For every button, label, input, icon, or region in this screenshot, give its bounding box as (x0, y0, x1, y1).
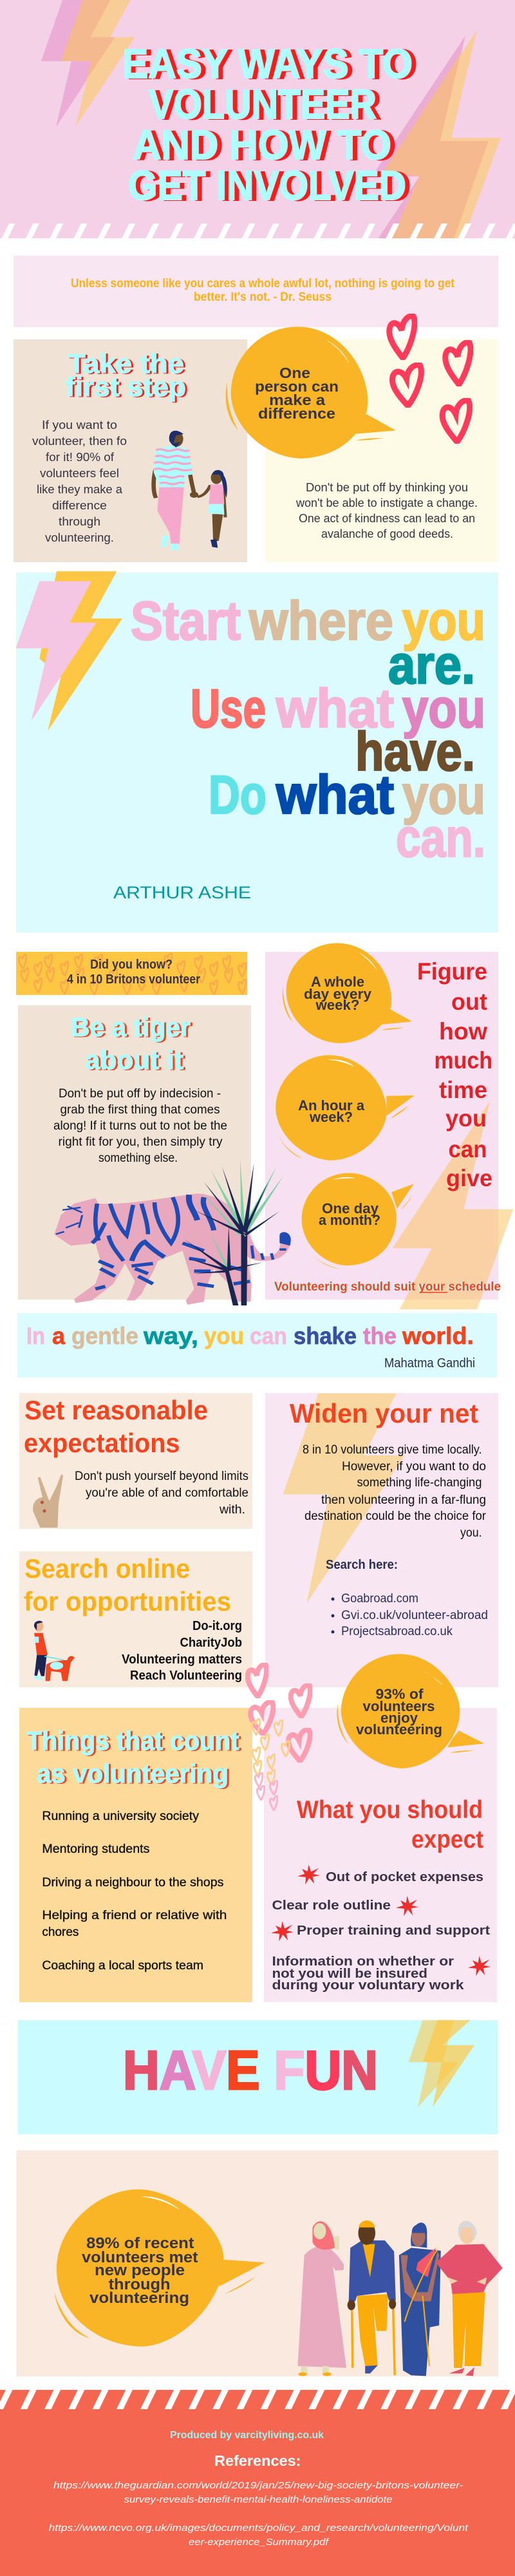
quote text: are. (388, 634, 475, 695)
heading: take the first step (66, 348, 188, 402)
quote text: what (276, 678, 394, 739)
speech bubble: One (279, 365, 310, 381)
speech bubble: whole day: day every (304, 986, 372, 1002)
text: search here (326, 1558, 488, 1638)
icon: person walking dog (34, 1621, 75, 1681)
list: Mentoring students (42, 1842, 149, 1856)
speech bubble: one day a month: One day (322, 1200, 379, 1217)
quote text: what (276, 764, 394, 825)
panel: figure out how much time (265, 943, 513, 1309)
title: VOLUNTEER (149, 81, 377, 128)
panel: Gandhi quote: a (52, 1323, 65, 1349)
panel: widen your net (265, 1393, 498, 1687)
panel: Gandhi quote: world. (402, 1323, 474, 1349)
illustration: tiger (54, 1193, 291, 1305)
panel: take the first step (14, 339, 247, 562)
heading: for opportunities (24, 1586, 231, 1616)
heading (24, 1395, 208, 1458)
panel: did you know (16, 952, 247, 995)
text: then volunteering in a far-flung (321, 1493, 486, 1507)
heading: be a tiger: Be a tiger (71, 1012, 191, 1042)
list: during your voluntary work (272, 1978, 465, 1993)
panel: Gandhi quote: the (363, 1323, 397, 1349)
footer (0, 2390, 515, 2576)
title: GET INVOLVED (128, 162, 406, 209)
text: website list: Do-it.org (192, 1619, 242, 1633)
text: website list: Reach Volunteering (130, 1669, 242, 1683)
text: search here: Search here: (326, 1558, 398, 1572)
speech bubble: 89%: 89% of recent (86, 2235, 194, 2252)
quote text: can. (396, 808, 485, 868)
title: GET INVOLVED (133, 163, 411, 209)
references list: https://www.ncvo.org.uk/images/documents/policy_and_research/volunteering/Volunt (49, 2523, 469, 2533)
text: website list: CharityJob (180, 1636, 242, 1650)
panel: have fun (18, 2020, 498, 2134)
text: website list: Volunteering matters (122, 1653, 242, 1667)
text: destination could be the choice for (304, 1510, 487, 1523)
text: with. (219, 1503, 245, 1517)
icon: father and daughter (154, 431, 227, 550)
credit: Produced by varcityliving.co.uk (170, 2430, 324, 2441)
list: chores (42, 1926, 79, 1939)
heading: figure out how much time you can give (417, 958, 492, 1191)
heading: Things that count (26, 1726, 239, 1756)
speech bubble: whole day (283, 943, 412, 1043)
text: you're able of and comfortable (86, 1486, 248, 1500)
speech bubble: one day a month (302, 1173, 414, 1269)
references list: https://www.theguardian.com/world/2019/jan/25/new-big-society-britons-volunteer- (53, 2480, 464, 2491)
speech bubble: whole day: week? (315, 997, 359, 1013)
panel: Dr Seuss quote: better. It's not. - Dr. Seuss (194, 290, 332, 304)
heading: Search online (24, 1553, 190, 1584)
panel: Gandhi quote: shake (294, 1323, 357, 1349)
text: indecision: along! If it turns out to not be the (53, 1119, 227, 1133)
title: AND HOW TO (137, 122, 396, 169)
panel: set reasonable expectations (19, 1393, 252, 1529)
speech bubble: 89%: volunteers met (82, 2249, 198, 2266)
heading: figure out how much time you can give: give (446, 1165, 492, 1191)
header panel (0, 0, 515, 238)
heading (26, 1726, 241, 1789)
text: take the first step body: volunteering. (45, 531, 114, 544)
attribution: Mahatma Gandhi (384, 1356, 475, 1370)
list: Information on whether or (272, 1955, 454, 1969)
attribution: ARTHUR ASHE (113, 883, 251, 902)
icon: peace hand (33, 1475, 63, 1528)
pattern: small hearts (19, 953, 246, 994)
text: search here: Gvi.co.uk/volunteer-abroad (341, 1609, 488, 1622)
text: one act of kindness (295, 481, 478, 540)
text: search here: Goabroad.com (341, 1592, 418, 1605)
heading: expectations (24, 1428, 180, 1458)
speech bubble: 93%: volunteering (356, 1721, 442, 1738)
heading: expect (411, 1826, 483, 1853)
quote text: Start (131, 591, 241, 651)
title (122, 41, 417, 209)
list: Driving a neighbour to the shops (42, 1876, 223, 1889)
person: woman in blue sari (399, 2222, 441, 2376)
panel: Gandhi quote: way, (143, 1323, 198, 1349)
speech bubble: person can (255, 378, 339, 395)
heading (24, 1553, 231, 1616)
icon: scattered hearts (248, 1665, 310, 1810)
heading: be a tiger (71, 1012, 192, 1075)
heading: as volunteering (37, 1759, 229, 1788)
list: Running a university society (42, 1810, 199, 1823)
text: take the first step body: like they make a (37, 483, 123, 496)
heading: be a tiger: Be a tiger (73, 1013, 192, 1043)
text: take the first step body: volunteers feel (40, 467, 119, 480)
text: something life-changing (357, 1476, 482, 1490)
stripes (0, 2390, 515, 2409)
speech bubble: hour a week (276, 1055, 415, 1160)
icon: lightning bolts left (41, 0, 135, 127)
quote text: you (402, 764, 485, 825)
person: older woman in red top (436, 2221, 503, 2376)
list: Coaching a local sports team (42, 1959, 203, 1973)
list: Proper training and support (297, 1924, 490, 1938)
title: EASY WAYS TO (122, 41, 413, 87)
text: one act of kindness: won't be able to instigate a change. (295, 497, 478, 509)
heading (297, 1796, 483, 1853)
speech bubble: 93%: volunteers (363, 1698, 435, 1714)
heading: figure out how much time you can give: out (451, 989, 487, 1015)
text: one act of kindness: Don't be put off by thinking you (306, 481, 468, 494)
panel: Gandhi quote: gentle (71, 1323, 138, 1349)
references heading: References: (214, 2452, 301, 2469)
speech bubble: 93%: enjoy (380, 1710, 418, 1726)
heading: figure out how much time you can give: you (445, 1105, 487, 1132)
icon: lightning bolt (283, 1394, 405, 1604)
heading: take the first step: first step (68, 372, 188, 402)
text: indecision: grab the first thing that comes (61, 1103, 220, 1117)
list: Clear role outline (272, 1899, 391, 1913)
speech bubble: make a (269, 392, 325, 408)
text: Don't push yourself beyond limits (75, 1470, 248, 1483)
text: indecision: something else. (98, 1151, 178, 1165)
title: AND HOW TO (133, 122, 391, 168)
heading: Things that count (28, 1727, 241, 1756)
heading: be a tiger: about it (87, 1046, 185, 1075)
speech bubble: difference (258, 405, 335, 422)
speech bubble: 93%: 93% of (376, 1686, 424, 1702)
text: indecision: right fit for you, then simply try (58, 1135, 223, 1149)
speech bubble: 89%: volunteering (89, 2289, 189, 2307)
panel: met new people (17, 2150, 503, 2376)
text: 8 in 10 volunteers give time locally. (303, 1443, 482, 1457)
speech bubble: 89%: new people (95, 2262, 185, 2279)
quote text: where (248, 591, 393, 651)
speech bubble: whole day: A whole (311, 974, 364, 990)
heading: Widen your net (290, 1398, 478, 1428)
speech bubble: hour a week: An hour a (298, 1097, 365, 1113)
icon: hearts (389, 316, 471, 442)
panel: did you know: 4 in 10 Britons volunteer (67, 972, 200, 987)
heading: take the first step: Take the (68, 348, 184, 379)
text: you. (460, 1526, 482, 1540)
heading: be a tiger: about it (85, 1045, 183, 1075)
quote text: you (402, 678, 485, 739)
speech bubble: hour a week: week? (309, 1109, 353, 1125)
quote text: have. (355, 721, 475, 782)
speech bubble: one day a month: a month? (319, 1212, 380, 1228)
text: website list (122, 1619, 242, 1683)
list: Out of pocket expenses (326, 1870, 483, 1884)
panel: things that count (19, 1708, 252, 2002)
text: indecision (53, 1087, 227, 1165)
panel: what you should expect (264, 1708, 497, 2002)
heading: as volunteering (39, 1759, 230, 1789)
panel: Arthur Ashe quote (16, 571, 498, 933)
list: Helping a friend or relative with (42, 1909, 227, 1922)
references list (49, 2480, 469, 2548)
speech bubble: 93% (337, 1654, 484, 1768)
person: man with crutches (348, 2221, 396, 2375)
heading: figure out how much time you can give: much (434, 1047, 492, 1074)
heading: figure out how much time you can give: can (448, 1136, 487, 1162)
text: take the first step body: volunteer, then fo (32, 435, 127, 448)
heading: Set reasonable (24, 1395, 208, 1425)
references list: eer-experience_Summary.pdf (189, 2537, 330, 2548)
panel: be a tiger about it (18, 1005, 251, 1300)
icon: stars (271, 1864, 491, 1976)
panel: Gandhi quote (17, 1313, 497, 1378)
heading: figure out how much time you can give: how (439, 1018, 487, 1045)
icon: lightning bolts (409, 2020, 474, 2107)
panel: did you know: Did you know? (90, 958, 173, 972)
heading: HAVE FUN (123, 2040, 378, 2101)
panel: Dr Seuss quote: Unless someone like you cares a whole awful lot, nothing is going to get (71, 277, 455, 290)
caption: volunteering should suit your schedule: Volunteering should suit your schedule (273, 1280, 500, 1294)
heading: take the first step: Take the (70, 349, 186, 379)
references list: survey-reveals-benefit-mental-health-loneliness-antidote (124, 2494, 393, 2505)
speech bubble: 89% (54, 2190, 265, 2347)
panel: one person can make a difference (226, 316, 498, 562)
stripes (0, 223, 515, 238)
text: However, if you want to do (342, 1460, 486, 1473)
panel: Dr Seuss quote (14, 256, 498, 327)
text: search here: Projectsabroad.co.uk (341, 1625, 453, 1638)
illustration: four people (297, 2221, 503, 2376)
heading: figure out how much time you can give: Figure (417, 958, 487, 985)
list (42, 1810, 227, 1973)
heading: take the first step: first step (66, 372, 186, 402)
text: take the first step body: through (59, 515, 100, 528)
text: one act of kindness: One act of kindness can lead to an (299, 512, 475, 525)
title: EASY WAYS TO (127, 41, 417, 88)
list: not you will be insured (272, 1967, 427, 1981)
illustration: palm plant (184, 1159, 283, 1305)
quote text: Use (191, 678, 266, 739)
text: one act of kindness: avalanche of good deeds. (321, 527, 453, 540)
icon: lightning bolts right (371, 30, 501, 238)
panel: Gandhi quote: can (250, 1323, 287, 1349)
text: take the first step body (32, 419, 127, 544)
text: take the first step body: for it! 90% of (46, 451, 115, 464)
icon: lightning bolt (393, 1101, 513, 1309)
person: woman in pink dress (297, 2221, 346, 2376)
caption: volunteering should suit your schedule: Volunteering should suit your schedule (274, 1280, 501, 1294)
panel: Gandhi quote: In (26, 1323, 45, 1349)
speech bubble: 89%: through (109, 2276, 171, 2293)
speech bubble (226, 327, 396, 459)
heading: What you should (297, 1796, 483, 1824)
title: VOLUNTEER (153, 82, 381, 128)
text (75, 1470, 248, 1517)
text: indecision: Don't be put off by indecision - (59, 1087, 221, 1101)
heading: figure out how much time you can give: time (439, 1077, 487, 1103)
text (303, 1443, 487, 1540)
icon: lightning bolt (16, 571, 122, 731)
text: take the first step body: If you want to (42, 419, 117, 431)
quote text: Do (209, 764, 267, 825)
panel: search online (19, 1551, 252, 1687)
panel: Gandhi quote: you (204, 1323, 244, 1349)
quote text: you (402, 591, 485, 651)
list (272, 1870, 490, 1993)
quote text (131, 591, 485, 868)
text: take the first step body: difference (52, 499, 107, 512)
